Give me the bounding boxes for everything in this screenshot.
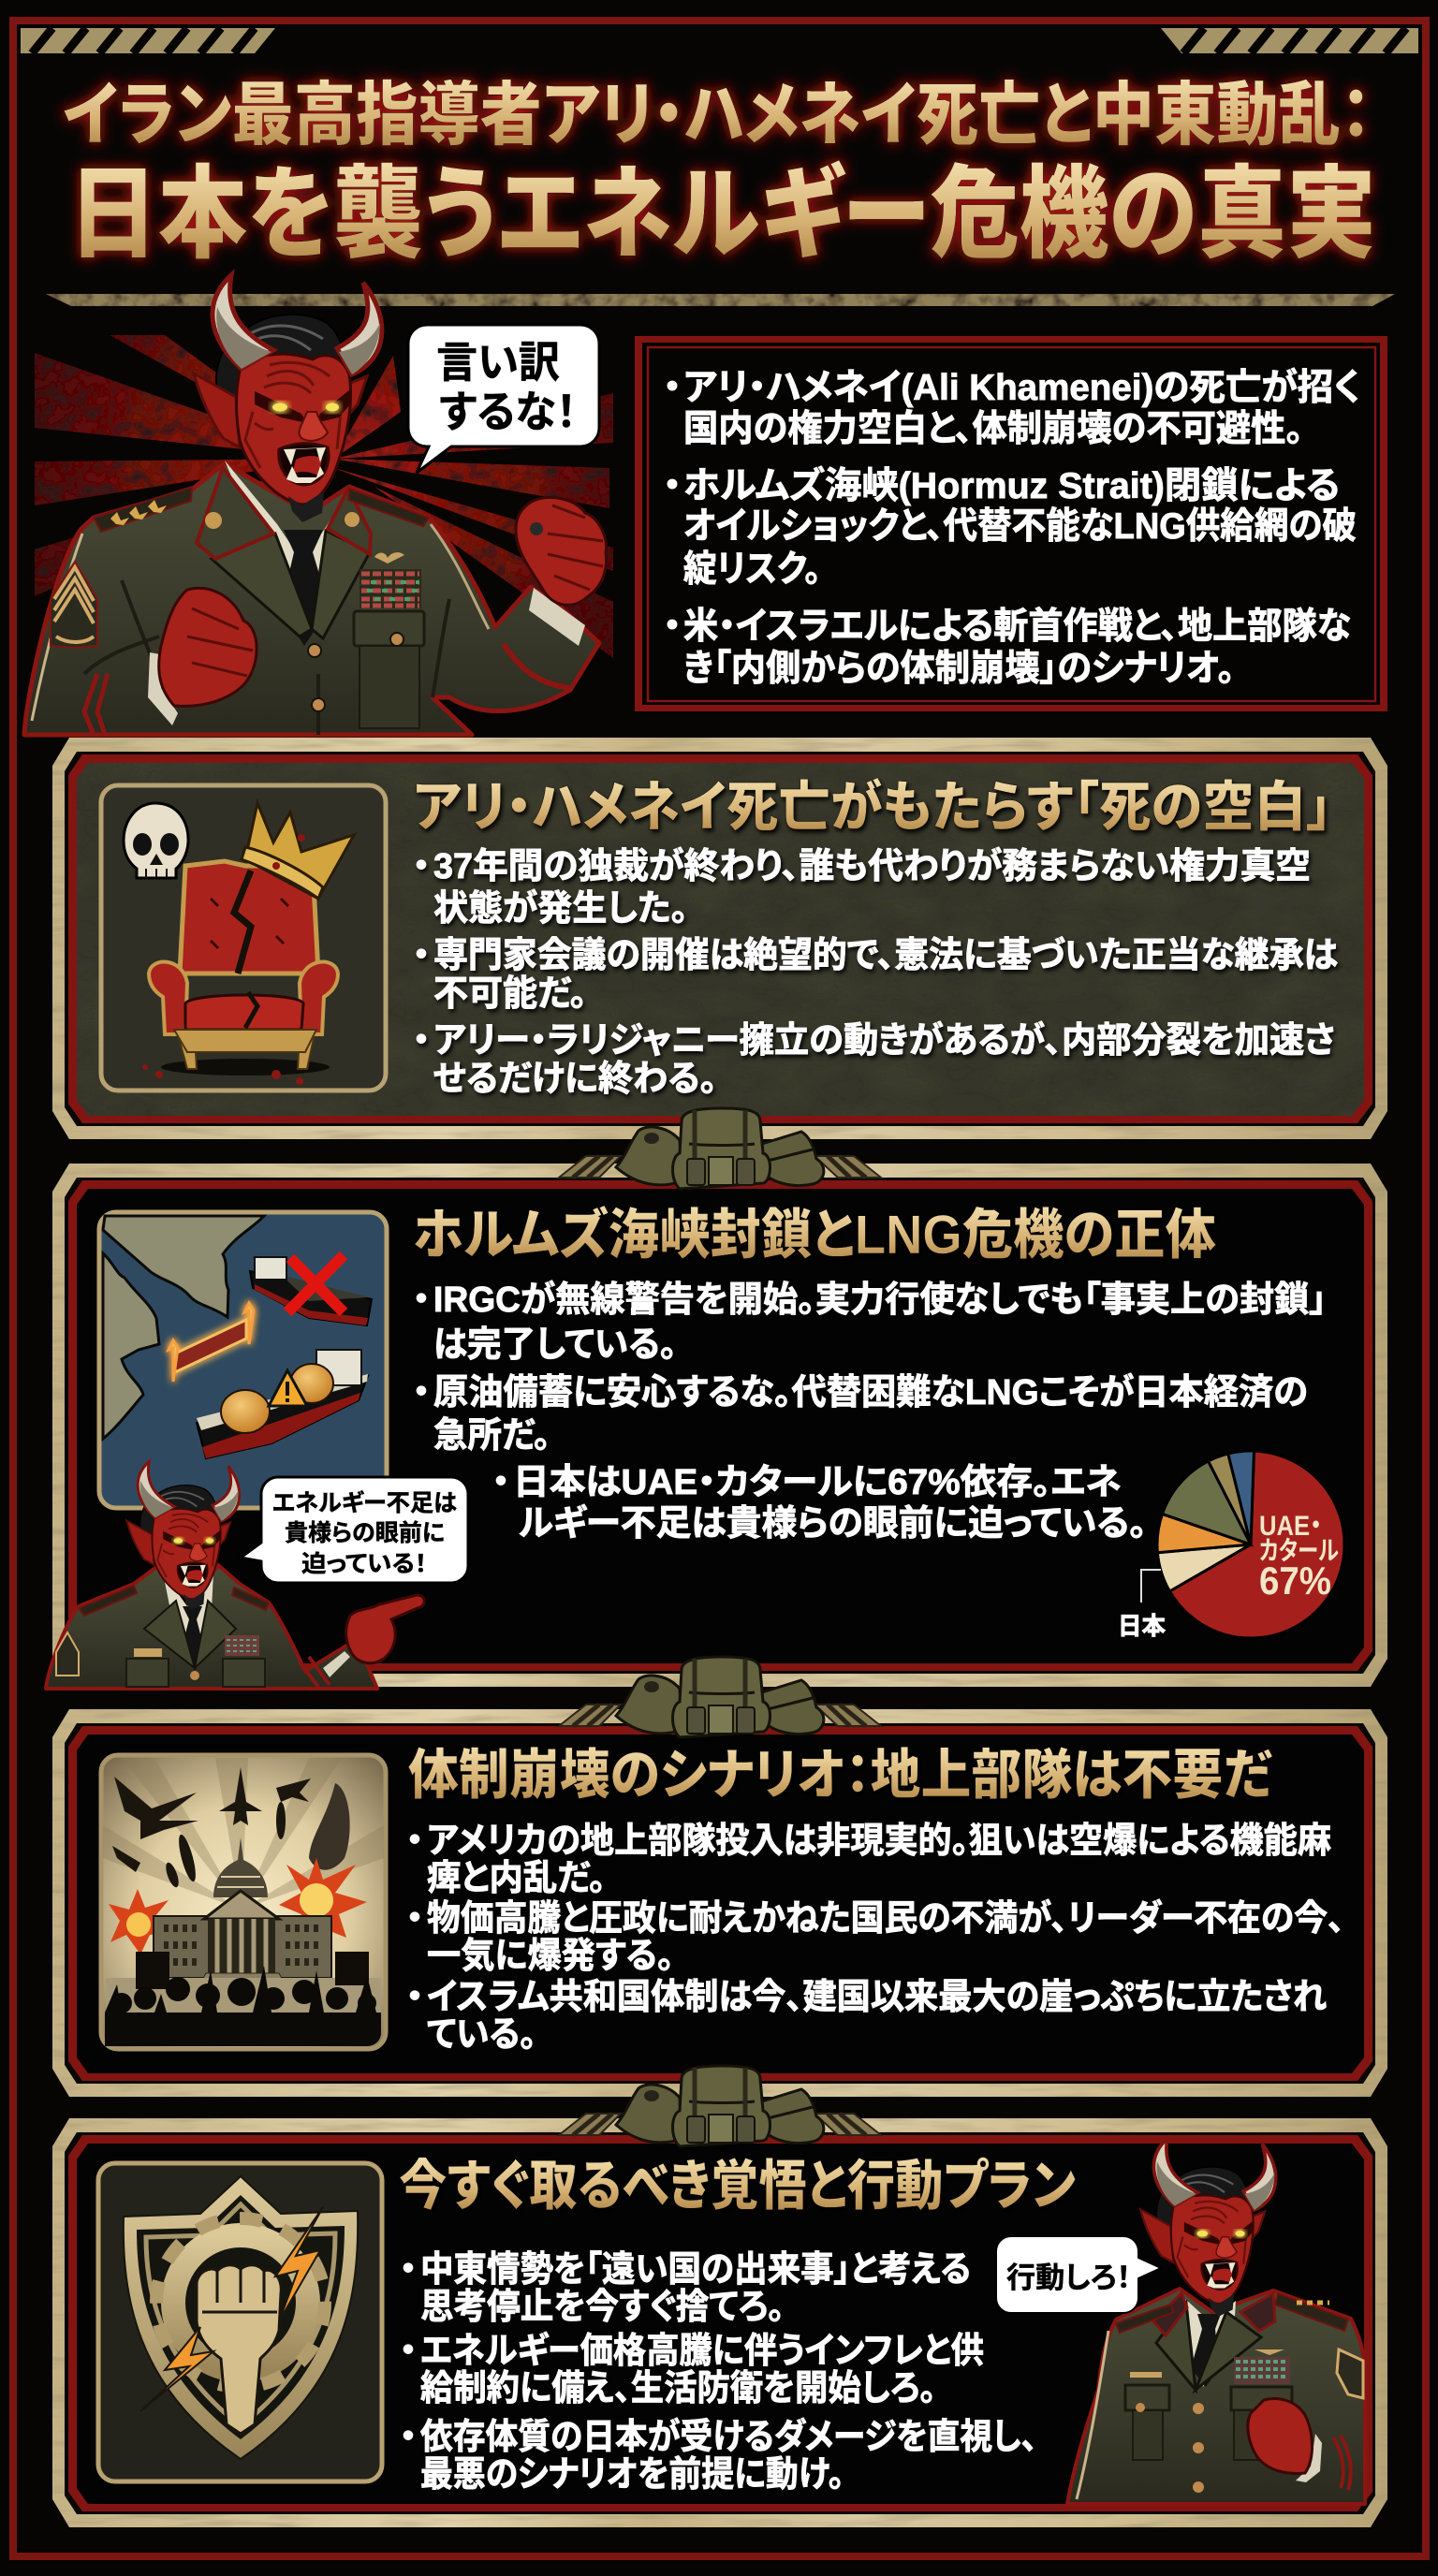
bullet list: ・: [399, 2250, 418, 2290]
bullet list: ・: [492, 1463, 510, 1502]
connector: backpacks 3: [559, 2066, 881, 2146]
speech bubble: 言い訳するな: [408, 325, 599, 473]
bullet list: IRGCが無線警告を開始。実力行使なしでも「事実上の封鎖」: [433, 1281, 1327, 1320]
bullet list: イスラム共和国体制は今、建国以来最大の崖っぷちに立たされ: [427, 1978, 1327, 2017]
bullet list: ルギー不足は貴様らの眼前に迫っている。: [519, 1504, 1147, 1544]
planes and bombs: [112, 1767, 350, 1889]
bullet list: 一気に爆発する。: [427, 1937, 674, 1976]
speech bubble: 言い訳するな: するな！: [439, 388, 577, 436]
chevrons: [51, 562, 97, 648]
bullet list: アリー・ラリジャニー擁立の動きがあるが、内部分裂を加速さ: [433, 1021, 1335, 1061]
bullet list: ・: [412, 936, 431, 975]
icon: broken throne, skull and crown: [101, 785, 386, 1090]
speech bubble: 行動しろ: 行動しろ！: [1006, 2261, 1131, 2294]
summary text: ・: [663, 607, 682, 647]
bullet list: 専門家会議の開催は絶望的で、憲法に基づいた正当な継承は: [433, 936, 1338, 975]
connector: backpacks 1: [559, 1108, 881, 1189]
character: angry general with raised fist: [24, 275, 607, 735]
summary text: オイルショックと、代替不能なLNG供給網の破: [683, 506, 1357, 547]
front fist: [159, 588, 257, 706]
summary box: [635, 336, 1387, 711]
summary text: [663, 368, 1360, 689]
bullet list: ・: [399, 2332, 418, 2371]
bullet list: ・: [399, 2418, 418, 2457]
summary text: き「内側からの体制崩壊」のシナリオ。: [683, 649, 1235, 689]
hazard stripes: top right: [1161, 28, 1418, 53]
summary text: 綻リスク。: [683, 549, 821, 590]
pie chart: import share: [1118, 1451, 1344, 1640]
fist: [197, 2265, 281, 2434]
speech bubble: 行動しろ: [996, 2236, 1161, 2313]
bullet list: 不可能だ。: [433, 974, 587, 1014]
panel: action plan: [52, 2118, 1387, 2527]
map land: [103, 1216, 264, 1317]
bullet list: 給制約に備え、生活防衛を開始しろ。: [420, 2369, 936, 2408]
lightning bolts: [275, 2207, 323, 2321]
pie chart: import share: カタール: [1259, 1536, 1339, 1565]
bullet list: 日本はUAE・カタールに67%依存。エネ: [513, 1463, 1122, 1502]
bullet list: ・: [405, 1899, 424, 1939]
icon: strait map: [99, 1212, 387, 1508]
bullet list: [412, 847, 1338, 1099]
icon: throne: [142, 861, 338, 1085]
bullet list: 物価高騰と圧政に耐えかねた国民の不満が、リーダー不在の今、: [427, 1899, 1344, 1939]
bullet list: [399, 2250, 1037, 2495]
icon: shield, gear and fist: [98, 2163, 382, 2481]
summary text: アリ・ハメネイ(Ali Khamenei)の死亡が招く: [683, 368, 1360, 408]
bullet list: は完了している。: [433, 1325, 677, 1365]
speech bubble: energy shortage: 迫っている！: [301, 1551, 427, 1577]
bullet list: ・: [412, 1281, 431, 1320]
icon: skull: [124, 803, 188, 878]
LNG tanker with warning: [197, 1350, 368, 1458]
tanker with red cross: [250, 1255, 372, 1325]
bullet list: 37年間の独裁が終わり、誰も代わりが務まらない権力真空: [433, 847, 1311, 886]
heading: 体制崩壊のシナリオ：地上部隊は不要だ: [408, 1745, 1273, 1806]
barrier: [169, 1303, 254, 1382]
summary text: ・: [663, 466, 682, 506]
bullet list: ・: [405, 1822, 424, 1861]
clenched fist: [1248, 2399, 1313, 2473]
speech bubble: energy shortage: [241, 1477, 468, 1583]
heading: ホルムズ海峡封鎖とLNG危機の正体: [413, 1205, 1216, 1266]
shirt collar and tie: [225, 461, 349, 646]
pie chart: import share: UAE・: [1259, 1511, 1322, 1542]
bullet list: ・: [412, 1373, 431, 1412]
heading: 今すぐ取るべき覚悟と行動プラン: [399, 2156, 1076, 2217]
panel: regime collapse: [52, 1709, 1387, 2097]
speech bubble: 言い訳するな: 言い訳: [436, 338, 560, 387]
pie chart: import share: 日本: [1118, 1612, 1166, 1640]
bullet list: 状態が発生した。: [433, 889, 688, 929]
bullet list: ・: [412, 847, 431, 886]
explosions: [109, 1858, 367, 1954]
divider bar: [46, 294, 1395, 306]
bullet list: アメリカの地上部隊投入は非現実的。狙いは空爆による機能麻: [427, 1822, 1331, 1861]
character: pointing general: [46, 1461, 424, 1689]
bullet list: 中東情勢を「遠い国の出来事」と考える: [420, 2250, 971, 2290]
summary text: 国内の権力空白と、体制崩壊の不可避性。: [683, 409, 1303, 449]
panel: death vacuum: [52, 738, 1387, 1139]
bullet list: 急所だ。: [433, 1416, 550, 1456]
hazard stripes: top left: [21, 28, 275, 53]
gear: [156, 2218, 325, 2387]
bullet list: 最悪のシナリオを前提に動け。: [420, 2455, 844, 2495]
bullet list: 原油備蓄に安心するな。代替困難なLNGこそが日本経済の: [433, 1373, 1308, 1412]
bullet list: [412, 1281, 1327, 1544]
bullet list: ている。: [427, 2015, 536, 2055]
speech bubble: energy shortage: 貴様らの眼前に: [285, 1520, 445, 1546]
epaulets: [94, 487, 192, 532]
cuffs: [529, 588, 585, 646]
panel: Hormuz and LNG: [52, 1164, 1387, 1687]
capitol building: [106, 1837, 381, 2015]
medals: [360, 552, 421, 608]
title: [63, 76, 1376, 271]
bullet list: 依存体質の日本が受けるダメージを直視し、: [420, 2418, 1037, 2457]
summary text: ・: [663, 368, 682, 408]
icon: crown: [242, 803, 354, 899]
connector: backpacks 2: [559, 1657, 881, 1737]
sun rays: [103, 1758, 384, 1910]
speech bubble: energy shortage: エネルギー不足は: [272, 1490, 457, 1516]
heading: アリ・ハメネイ死亡がもたらす「死の空白」: [413, 777, 1332, 838]
summary text: ホルムズ海峡(Hormuz Strait)閉鎖による: [683, 466, 1340, 506]
icon: air strikes over capitol and crowd: [101, 1755, 386, 2049]
bullet list: ・: [405, 1978, 424, 2017]
summary text: 米・イスラエルによる斬首作戦と、地上部隊な: [683, 607, 1351, 647]
bullet list: せるだけに終わる。: [433, 1060, 717, 1099]
raised fist: [516, 498, 607, 605]
sunburst behind character: [35, 335, 613, 658]
bullet list: ・: [412, 1021, 431, 1061]
bullet list: 思考停止を今すぐ捨てろ。: [420, 2288, 785, 2327]
character: general with clenched fist: [1067, 2139, 1365, 2504]
bullet list: エネルギー価格高騰に伴うインフレと供: [420, 2332, 984, 2371]
bullet list: [405, 1822, 1344, 2055]
crowd silhouette: [105, 1966, 381, 2046]
bullet list: 痺と内乱だ。: [427, 1859, 606, 1898]
pie chart: import share: 67%: [1259, 1559, 1331, 1603]
pointing hand: [346, 1595, 424, 1663]
